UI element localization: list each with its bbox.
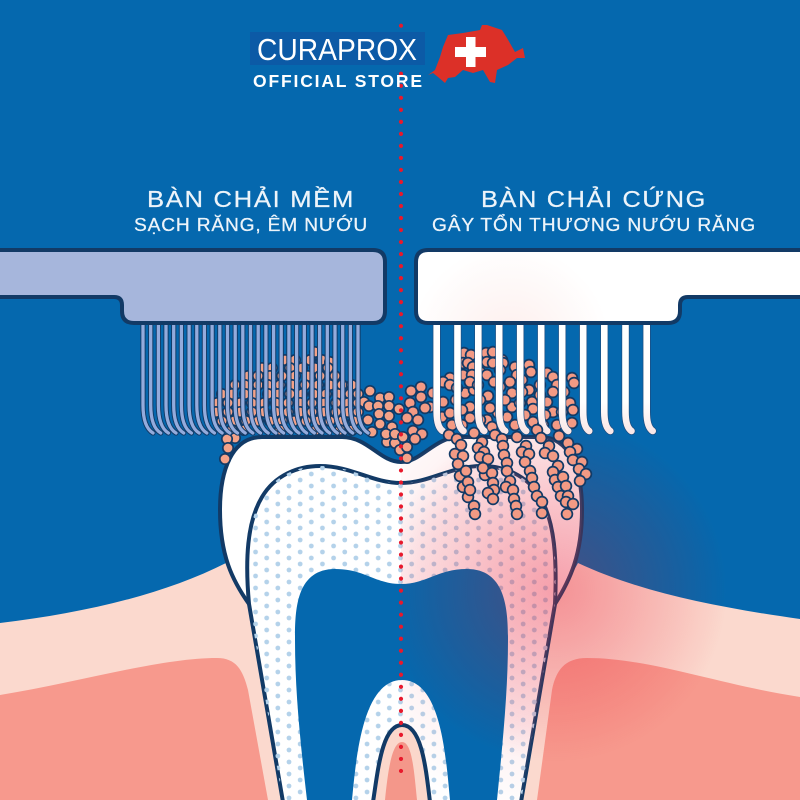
- official store label: OFFICIAL STORE: [253, 71, 422, 91]
- icon: Swiss cross: [455, 37, 486, 67]
- heading: soft brush: [134, 184, 368, 235]
- heading: hard brush: [432, 184, 756, 235]
- enamel: [220, 437, 582, 640]
- heading: hard brush: BÀN CHẢI CỨNG: [481, 184, 707, 212]
- enamel tint: [401, 437, 582, 600]
- hard toothbrush head: [416, 250, 800, 323]
- inflammation glow: darkening: [401, 400, 800, 800]
- root canal: [373, 725, 430, 800]
- tooth: [220, 437, 582, 800]
- heading: soft brush: BÀN CHẢI MỀM: [147, 184, 355, 212]
- root canal inner: [385, 742, 417, 800]
- heading: hard brush: GÂY TỔN THƯƠNG NƯỚU RĂNG: [432, 214, 756, 235]
- soft brush bristles: [143, 323, 368, 433]
- hard brush bristles: [437, 323, 653, 431]
- inflammation glow: red: [401, 400, 800, 800]
- dentin dots: [247, 466, 556, 800]
- icon: Switzerland map: [428, 25, 525, 83]
- brand name: CURAPROX: [257, 32, 417, 67]
- center dotted divider line: [399, 26, 403, 782]
- plaque particles: soft brush: [211, 347, 412, 464]
- dentin tint: [401, 466, 556, 790]
- gums: [0, 563, 800, 800]
- logo: [250, 25, 525, 91]
- pulp: [295, 569, 508, 800]
- plaque particles: hard brush, upper cluster: [402, 347, 579, 444]
- plaque particles: hard brush, pushed into gum line: [444, 425, 591, 519]
- soft toothbrush head: [0, 250, 385, 323]
- logo box: [250, 32, 425, 65]
- heading: soft brush: SẠCH RĂNG, ÊM NƯỚU: [134, 214, 368, 235]
- dentin: [247, 466, 556, 800]
